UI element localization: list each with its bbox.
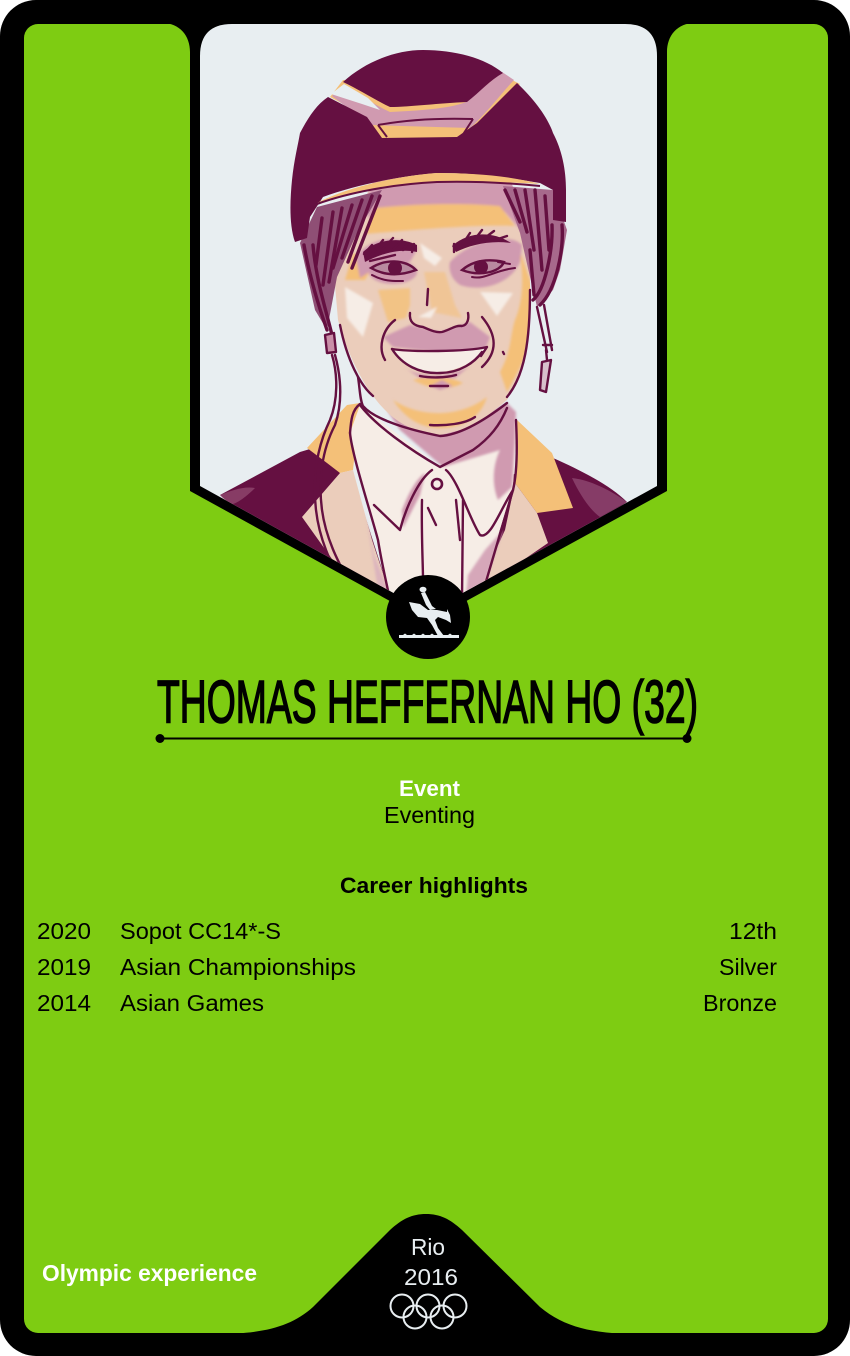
event block [384,776,475,828]
riding helmet [290,50,566,242]
career highlights table: 2019 [37,954,91,980]
event block: Event [399,776,461,801]
portrait background [200,24,657,624]
olympic experience label: Olympic experience [42,1260,257,1286]
games location and year: Rio [411,1234,445,1260]
jacket [220,403,627,610]
shirt and collar [350,403,517,612]
icon: olympic rings [390,1294,466,1328]
career highlights table: 2020 [37,918,91,944]
neck and face [333,178,535,436]
face shading [345,178,535,428]
career highlights table: 2014 [37,990,91,1016]
career highlights table: Asian Games [120,990,264,1016]
career highlights heading: Career highlights [340,873,528,898]
sport badge [386,575,470,659]
career highlights table: 12th [729,918,777,944]
career highlights table: Silver [719,954,777,980]
career highlights table: Sopot CC14*-S [120,918,281,944]
games location and year: 2016 [404,1264,458,1290]
chin straps [315,305,552,590]
portrait illustration [200,24,657,624]
icon: eventing horse and rider [399,587,459,638]
mouth [394,348,484,372]
career highlights table: Bronze [703,990,777,1016]
name underline [156,734,692,743]
games location and year [404,1234,458,1290]
career highlights table: Asian Championships [120,954,356,980]
hair [300,186,567,335]
event block: Eventing [384,802,475,828]
bottom tab [215,1214,640,1334]
portrait frame [162,23,695,622]
eyes and eyebrows [363,230,515,281]
career highlights table [37,918,777,1016]
